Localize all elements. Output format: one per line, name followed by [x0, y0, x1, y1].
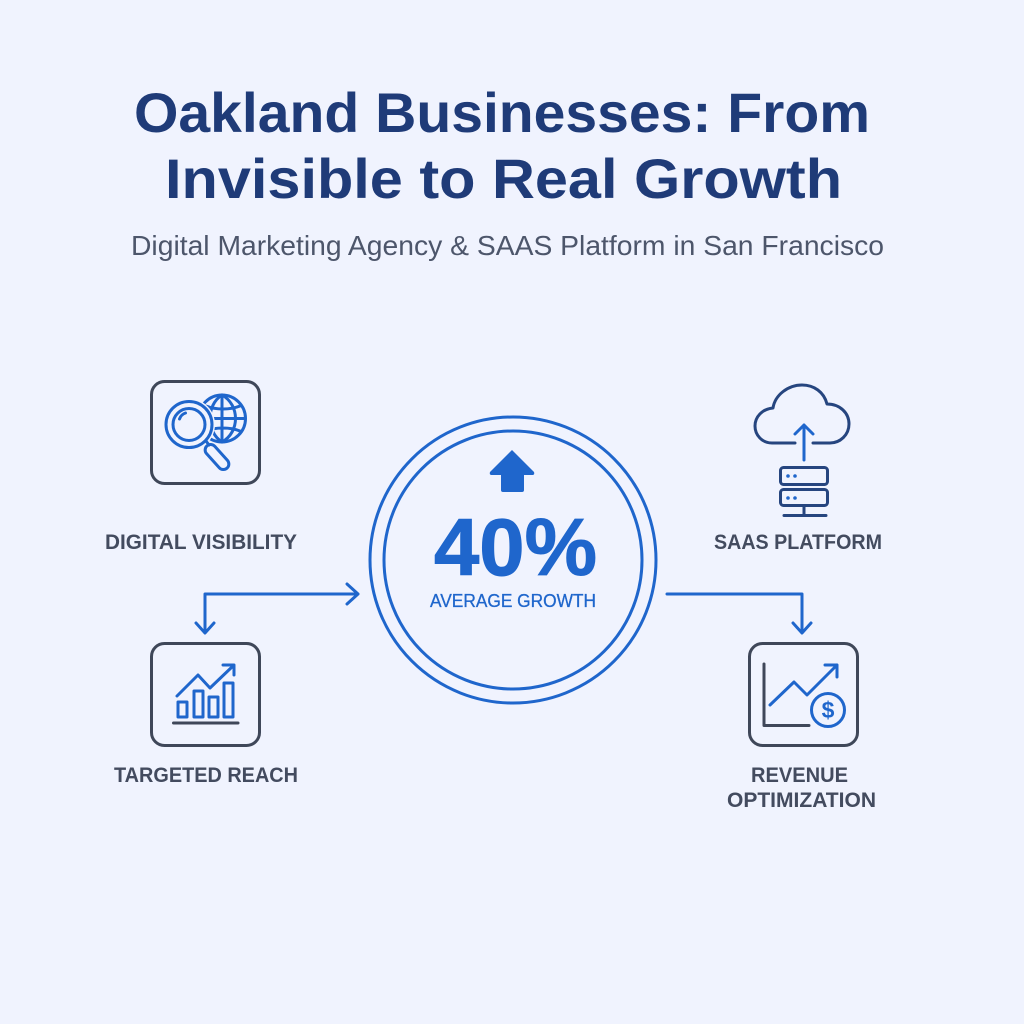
outer and inner rings: [370, 417, 656, 703]
label: revenue optimization: OPTIMIZATION: [727, 789, 876, 812]
panel: saas platform: [714, 385, 882, 554]
panel: central growth stat: [370, 417, 656, 703]
icon: up arrow: [490, 450, 534, 492]
title: [134, 81, 870, 210]
stat: 40%: 40%: [434, 503, 597, 593]
title: Invisible to Real Growth: [165, 147, 842, 210]
icon: cloud and server: [755, 385, 849, 516]
arrow: from centre to revenue optimization: [667, 594, 811, 633]
label: revenue optimization: REVENUE: [751, 764, 848, 787]
subtitle: Digital Marketing Agency & SAAS Platform in San Francisco: [131, 230, 884, 261]
title: Oakland Businesses: From: [134, 81, 870, 144]
panel: revenue optimization: [727, 644, 876, 812]
label: revenue optimization: [727, 764, 876, 812]
label: targeted reach: TARGETED REACH: [114, 764, 298, 787]
icon: revenue chart with dollar: [750, 644, 858, 746]
panel: digital visibility: [105, 382, 297, 554]
icon: magnifier and globe: [152, 382, 260, 484]
label: average growth: AVERAGE GROWTH: [430, 591, 596, 611]
label: saas platform: SAAS PLATFORM: [714, 531, 882, 554]
label: digital visibility: DIGITAL VISIBILITY: [105, 531, 297, 554]
icon: bar chart with trend arrow: [152, 644, 260, 746]
icon: revenue chart with dollar: $: [822, 697, 835, 723]
arrow: into centre and down to targeted reach: [196, 584, 358, 633]
panel: targeted reach: [114, 644, 298, 787]
